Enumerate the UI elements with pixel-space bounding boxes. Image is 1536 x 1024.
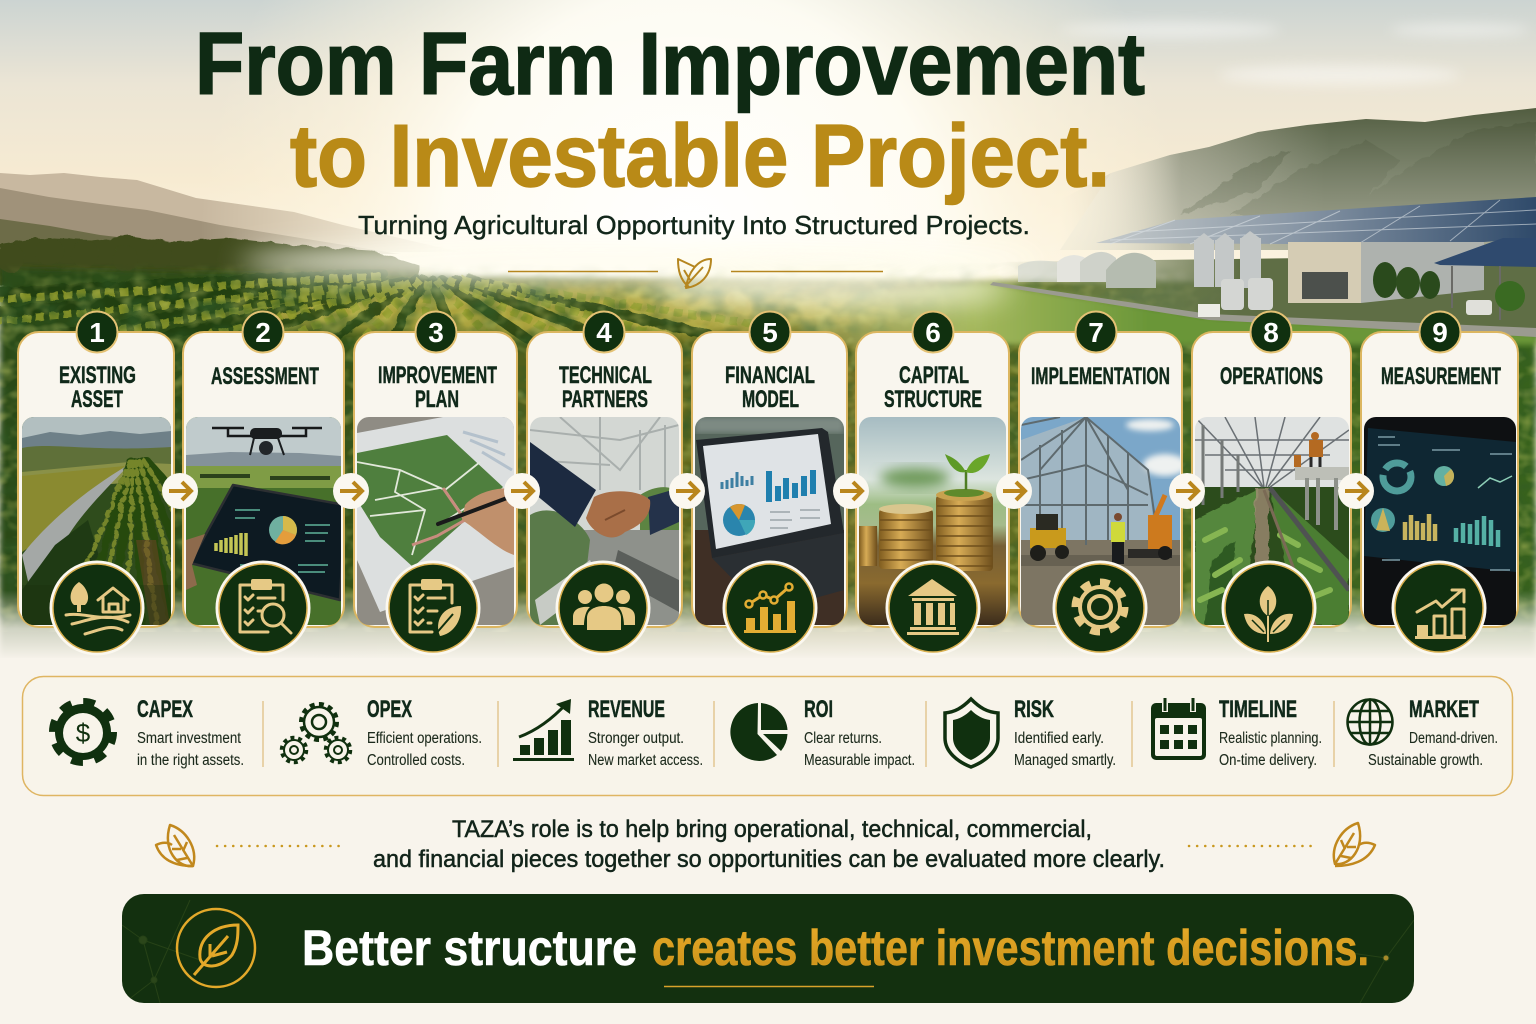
- icon: globe: [1348, 700, 1392, 744]
- suit sleeve left: [530, 442, 596, 527]
- icon: pie with slices: [730, 703, 788, 761]
- warehouse front wall: [1288, 242, 1361, 303]
- icon: dollar gear: $: [76, 718, 91, 748]
- item: timeline: [1151, 696, 1322, 769]
- roi copy: ROI: [804, 696, 833, 723]
- step 6: capital structure: [856, 332, 1009, 627]
- card 8 heading: OPERATIONS: [1220, 363, 1323, 390]
- foliage texture dark: [0, 262, 1536, 632]
- right solar canopy: [1434, 238, 1536, 267]
- process arrows: [162, 473, 1374, 509]
- icon: calendar: [1151, 697, 1206, 760]
- pen: [438, 498, 507, 524]
- card 3 heading: PLAN: [415, 386, 459, 413]
- icon: sprout: [1223, 562, 1315, 654]
- tree tops at the left horizon: [0, 238, 275, 272]
- laptop screen: [703, 434, 831, 549]
- item: market: [1348, 696, 1498, 769]
- step 8: operations: [1192, 332, 1351, 627]
- warehouse side wall: [1361, 242, 1484, 303]
- laptop lid: [696, 428, 844, 558]
- screen: [1364, 428, 1516, 572]
- step 9: measurement: [1361, 332, 1518, 627]
- roi copy: Measurable impact.: [804, 752, 915, 769]
- step 7: implementation: [1019, 332, 1187, 627]
- hand: [462, 489, 514, 555]
- item: revenue: [513, 696, 703, 769]
- revenue copy: New market access.: [588, 752, 703, 769]
- card 1 photo: orchard rows and river: [22, 417, 171, 625]
- yellow loader: [1030, 514, 1069, 561]
- icon: left leaves: [156, 825, 194, 866]
- icon: shield: [945, 699, 998, 767]
- tall silos: [1194, 231, 1261, 288]
- arrow 4 to 5: [669, 473, 705, 509]
- card 2: [183, 332, 344, 627]
- card 4 heading: [559, 362, 652, 413]
- landscape backdrop: sky, hills, orchard and solar facility: [0, 0, 1536, 688]
- hand: [186, 534, 205, 590]
- arrow 7 to 8: [1169, 473, 1205, 509]
- icon: leaf in circle: [177, 909, 255, 987]
- revenue copy: Stronger output.: [588, 730, 684, 747]
- roi copy: [804, 696, 915, 769]
- short tanks: [1221, 278, 1273, 310]
- capex copy: in the right assets.: [137, 752, 244, 769]
- step 1: existing asset: [17, 331, 175, 628]
- badge 3: [416, 312, 456, 352]
- solar facility: [990, 197, 1536, 337]
- badge 5: 5: [762, 317, 778, 348]
- tablet rows: [235, 510, 330, 572]
- risk copy: Identified early.: [1014, 730, 1104, 747]
- card 6 heading: STRUCTURE: [884, 386, 982, 413]
- card 1 heading: EXISTING: [59, 362, 136, 389]
- rail: [1270, 488, 1349, 590]
- coin stacks: [859, 489, 993, 571]
- title line 2: to Investable Project.: [290, 106, 1110, 205]
- left posts: [1203, 425, 1238, 505]
- plants: [1195, 488, 1349, 625]
- seedling: [945, 454, 990, 490]
- gold and teal bars: [1405, 514, 1435, 541]
- badge 2: 2: [255, 317, 271, 348]
- glass roof lines: [1195, 417, 1349, 487]
- card 7 heading: IMPLEMENTATION: [1031, 363, 1170, 390]
- closing banner: [122, 894, 1414, 1003]
- workers: [1294, 432, 1323, 467]
- dotted rule left: [217, 845, 342, 847]
- ground strip behind the buildings: [993, 255, 1536, 333]
- underline accent: [664, 986, 874, 988]
- title: [195, 14, 1145, 205]
- banner background: [122, 894, 1414, 1003]
- badge 6: [912, 312, 954, 352]
- timeline copy: Realistic planning.: [1219, 730, 1322, 747]
- step 5: financial model: [692, 332, 847, 627]
- large chart: [769, 470, 813, 502]
- steel frame: [1021, 417, 1158, 545]
- badge 2: [242, 312, 284, 352]
- icon: farm tree and barn: [51, 562, 143, 654]
- orchard field: [0, 268, 1536, 672]
- statement text: and financial pieces together so opportunities can be evaluated more clearly.: [373, 846, 1165, 873]
- revenue copy: REVENUE: [588, 696, 665, 723]
- card 4 heading: TECHNICAL: [559, 362, 652, 389]
- teal bars: [1456, 516, 1498, 547]
- mountain haze: [1060, 108, 1536, 250]
- arrow 1 to 2: [162, 473, 198, 509]
- card 4: [527, 332, 682, 627]
- card 2 heading: ASSESSMENT: [211, 363, 319, 390]
- card 6 photo: coin stacks and seedling: [859, 417, 1006, 625]
- sparkline: [1478, 476, 1512, 488]
- card 4 heading: PARTNERS: [562, 386, 648, 413]
- badge 1: [76, 312, 118, 352]
- right legs: [1307, 478, 1336, 530]
- capex copy: Smart investment: [137, 730, 242, 747]
- opex copy: Controlled costs.: [367, 752, 465, 769]
- card 7: [1019, 332, 1182, 627]
- card 5 heading: MODEL: [742, 386, 799, 413]
- arrow 3 to 4: [504, 473, 540, 509]
- icon: people group: [557, 562, 649, 654]
- badge 9: 9: [1432, 317, 1448, 348]
- dotted rule right: [1189, 845, 1312, 847]
- item: risk: [945, 696, 1116, 769]
- step 2: assessment: [183, 332, 345, 627]
- arrow 5 to 6: [833, 473, 869, 509]
- statement text: TAZA’s role is to help bring operational, technical, commercial,: [452, 816, 1092, 843]
- arrow 2 to 3: [333, 473, 369, 509]
- lower pie: [1371, 508, 1395, 532]
- badge 4: [584, 312, 624, 352]
- risk copy: RISK: [1014, 696, 1054, 723]
- card 8 photo: greenhouse crop rows: [1195, 417, 1349, 625]
- icon: bank building: [887, 562, 979, 654]
- step 4: technical partners: [527, 332, 682, 627]
- right mountains: [980, 108, 1536, 250]
- fade into the cream page: [0, 590, 1536, 660]
- road: [990, 282, 1536, 337]
- roi copy: Clear returns.: [804, 730, 882, 747]
- icon: leaf pair: [678, 259, 711, 288]
- arrow 8 to 9: [1338, 473, 1374, 509]
- timeline copy: On-time delivery.: [1219, 752, 1317, 769]
- decorative network: [122, 900, 1414, 1003]
- donut: [1383, 463, 1411, 491]
- icon: gear: [1054, 562, 1146, 654]
- card 2 photo: drone and tablet: [186, 417, 345, 625]
- opex copy: OPEX: [367, 696, 412, 723]
- badge 9: [1420, 312, 1460, 352]
- timeline copy: TIMELINE: [1219, 696, 1297, 723]
- card 3 heading: [378, 362, 497, 413]
- canopy posts: [1452, 266, 1500, 320]
- badge 4: 4: [596, 317, 612, 348]
- round step icons: [51, 562, 1485, 654]
- card 1: [18, 332, 174, 627]
- card 5 heading: FINANCIAL: [725, 362, 815, 389]
- clasped hands: [586, 491, 650, 537]
- frame shading: [1021, 417, 1155, 540]
- card 3 photo: field map with hand and pen: [357, 417, 514, 625]
- tablet bars: [216, 533, 246, 556]
- warehouse door: [1302, 272, 1348, 299]
- risk copy: Managed smartly.: [1014, 752, 1116, 769]
- market copy: Sustainable growth.: [1368, 752, 1483, 769]
- subtitle: Turning Agricultural Opportunity Into Structured Projects.: [358, 210, 1030, 240]
- small greenhouses: [1018, 252, 1156, 288]
- opex copy: Efficient operations.: [367, 730, 482, 747]
- orchard rows: [0, 273, 760, 340]
- sky: [0, 0, 1536, 300]
- sky glow: [0, 0, 1536, 300]
- strip dividers: [263, 701, 1334, 767]
- icon: dollar gear: [53, 702, 113, 762]
- haze at the field horizon: [240, 242, 1040, 282]
- card 6 heading: CAPITAL: [899, 362, 969, 389]
- badge 6: 6: [925, 317, 941, 348]
- badge 1: 1: [89, 317, 105, 348]
- revenue copy: [588, 696, 703, 769]
- card 9: [1361, 332, 1518, 627]
- icon: checklist with leaf: [387, 562, 479, 654]
- divider with leaf icon: [508, 259, 883, 288]
- screen pie: [723, 504, 755, 536]
- icon: growth chart: [1393, 562, 1485, 654]
- banner statement: creates better investment decisions.: [652, 920, 1369, 976]
- title line 1: From Farm Improvement: [195, 14, 1145, 113]
- rail highlight: [1264, 490, 1315, 625]
- market copy: MARKET: [1409, 696, 1479, 723]
- card 5 heading: [725, 362, 815, 413]
- clouds: [1060, 22, 1530, 85]
- tablet pie: [269, 516, 297, 544]
- worker: [1111, 513, 1125, 564]
- keyboard: [712, 533, 844, 598]
- icon: rising bars: [513, 699, 574, 761]
- leaf highlights: [1200, 530, 1330, 600]
- icon: clipboard with magnifier: [217, 562, 309, 654]
- card 1 heading: ASSET: [71, 386, 123, 413]
- card 6 heading: [884, 362, 982, 413]
- card 3: [354, 332, 517, 627]
- card 7 photo: greenhouse construction: [1021, 417, 1187, 625]
- icon: right leaves: [1334, 823, 1375, 866]
- item: roi: [730, 696, 915, 769]
- suit sleeve right: [648, 488, 679, 535]
- badge 7: 7: [1088, 317, 1104, 348]
- badge 3: 3: [428, 317, 444, 348]
- text lines: [1378, 437, 1512, 570]
- card 4 photo: handshake in greenhouse: [530, 417, 679, 625]
- market copy: Demand-driven.: [1409, 730, 1498, 747]
- badge 7: [1076, 312, 1116, 352]
- risk copy: [1014, 696, 1116, 769]
- number badges: [76, 312, 1460, 352]
- drone: [212, 428, 322, 455]
- item: opex: [282, 696, 482, 769]
- strip frame: [22, 676, 1512, 796]
- item: capex: [53, 696, 244, 769]
- banner statement: [302, 920, 1369, 976]
- small chart: [722, 472, 752, 489]
- timeline copy: [1219, 696, 1322, 769]
- arrow 6 to 7: [996, 473, 1032, 509]
- market copy: [1368, 696, 1498, 769]
- icon: bar chart with line: [724, 562, 816, 654]
- statement text: [373, 816, 1165, 873]
- banner statement: Better structure: [302, 920, 637, 976]
- long solar roof: [1096, 197, 1536, 244]
- trees and vehicles: [1198, 262, 1525, 317]
- foliage texture light: [0, 262, 1536, 632]
- cream band below the fade: [0, 658, 1536, 688]
- card 1 heading: [59, 362, 136, 413]
- capex copy: [137, 696, 244, 769]
- card 3 heading: IMPROVEMENT: [378, 362, 497, 389]
- step 3: improvement plan: [354, 332, 517, 627]
- lawn below the facility: [800, 283, 1536, 345]
- panel: investment fundamentals strip: [22, 676, 1512, 796]
- TAZA role statement: [156, 816, 1375, 873]
- tablet: [190, 485, 345, 600]
- badge 5: [750, 312, 790, 352]
- mountain ridges: [1180, 122, 1536, 215]
- roof panel lines: [1110, 200, 1536, 244]
- opex copy: [367, 696, 482, 769]
- card 8: [1192, 332, 1351, 627]
- card 5: [692, 332, 847, 627]
- icon: three gears: [282, 704, 350, 762]
- badge 8: 8: [1263, 317, 1279, 348]
- card 5 photo: laptop with charts: [695, 417, 844, 625]
- right platform: [1295, 467, 1349, 480]
- yellow light on the crops: [220, 284, 900, 336]
- lawn wash: [650, 266, 1010, 310]
- blurred tree: [880, 468, 950, 488]
- card 9 photo: dashboard screen: [1364, 417, 1516, 625]
- orange machine: [1128, 495, 1172, 560]
- panel: nine-step process: [18, 312, 1518, 654]
- left hills: [0, 173, 460, 254]
- screen table rows: [770, 510, 820, 528]
- distant tree line: [0, 236, 420, 286]
- card 6: [856, 332, 1009, 627]
- capex copy: CAPEX: [137, 696, 193, 723]
- small pie: [1434, 466, 1454, 486]
- badge 8: [1250, 312, 1292, 352]
